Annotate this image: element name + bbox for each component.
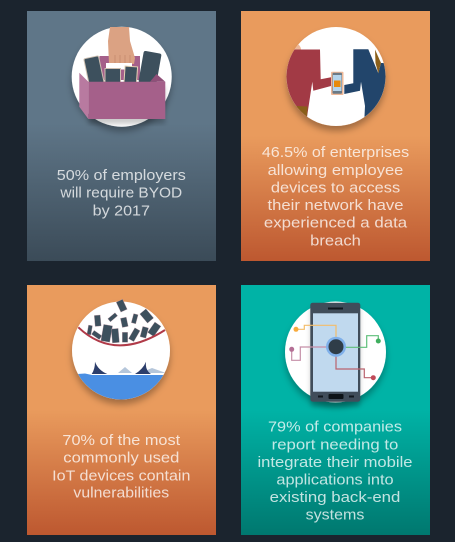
panel background: [27, 11, 216, 261]
stat text: vulnerabilities: [73, 486, 169, 502]
stat text: breach: [310, 233, 361, 249]
stat text: integrate their mobile: [258, 455, 412, 471]
panel: BYOD: [27, 11, 216, 261]
icon: smartphone with circuit lines: [285, 302, 386, 402]
panel background: [241, 11, 430, 261]
stat text: IoT devices contain: [52, 468, 190, 484]
stat text: systems: [306, 508, 364, 524]
panel: IoT vulnerabilities: [27, 285, 216, 535]
panel background: [27, 285, 216, 535]
stat text: [52, 433, 190, 502]
panel background: [241, 285, 430, 535]
stat text: devices to access: [271, 180, 400, 196]
stat text: 70% of the most: [62, 433, 180, 449]
stat text: experienced a data: [264, 216, 408, 232]
stat text: report needing to: [272, 437, 398, 453]
stat text: existing back-end: [270, 490, 400, 506]
stat text: by 2017: [93, 203, 150, 219]
panel: back-end integration: [241, 285, 430, 535]
stat text: will require BYOD: [59, 186, 182, 202]
stat text: commonly used: [63, 451, 179, 467]
stat text: 46.5% of enterprises: [262, 145, 409, 161]
icon: phones in a net over shark water: [70, 299, 170, 405]
icon: two business people exchanging phone: [280, 27, 392, 126]
stat text: [258, 420, 412, 524]
stat text: [262, 145, 409, 249]
icon: hand carrying box of phones: [72, 27, 172, 127]
panel: data breach: [241, 11, 430, 261]
stat text: allowing employee: [268, 163, 403, 179]
stat text: 50% of employers: [57, 168, 186, 184]
stat text: their network have: [268, 198, 404, 214]
stat text: applications into: [276, 472, 394, 488]
stat text: [57, 168, 186, 219]
stat text: 79% of companies: [268, 420, 402, 436]
